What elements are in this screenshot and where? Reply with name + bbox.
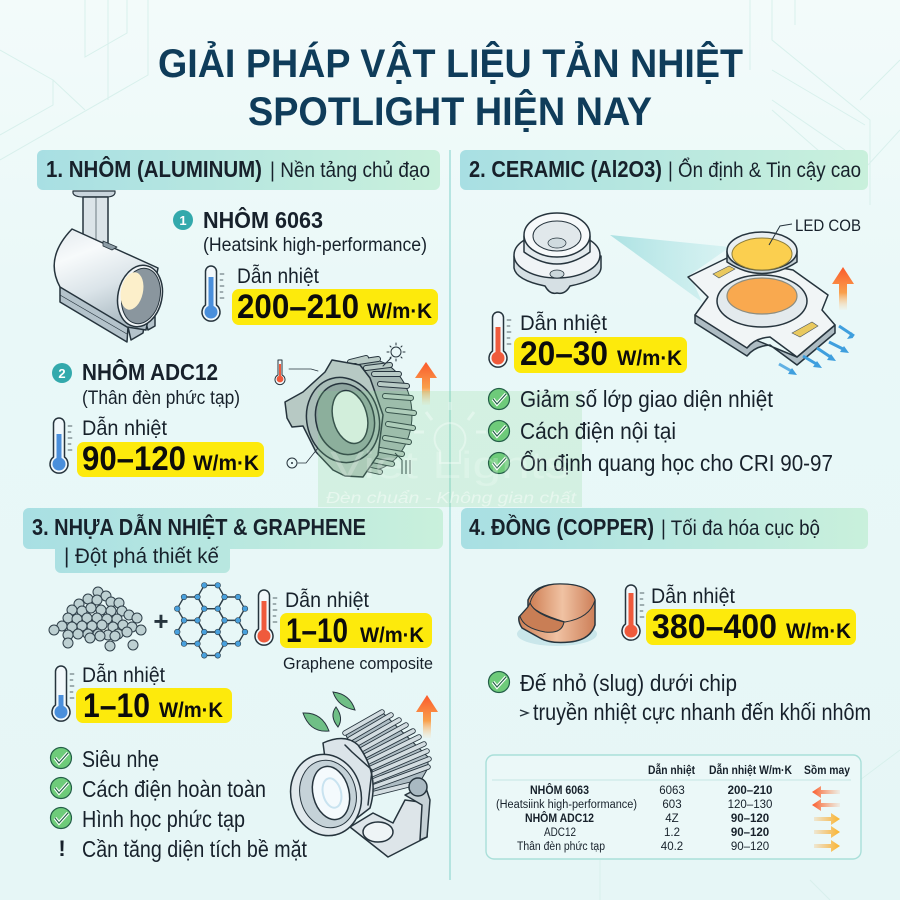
value: graphene 1-10: W/m·K — [360, 624, 424, 647]
table: comparison: 90–120 — [731, 827, 769, 839]
arrow: heat up — [415, 362, 437, 405]
table: comparison: Dẫn nhiệt W/m·K — [709, 764, 793, 777]
panel: 1 aluminum — [37, 150, 440, 478]
list: ceramic benefits: Cách điện nội tại — [520, 418, 676, 444]
heading: ceramic: | Ổn định & Tin cậy cao — [668, 158, 861, 182]
icon: copper slug — [517, 584, 597, 646]
list: plastic benefits: ! — [58, 836, 66, 861]
list: plastic benefits: Cần tăng diện tích bề mặt — [82, 836, 308, 862]
value: 90-120: Dẫn nhiệt — [82, 417, 167, 440]
table: comparison: 200–210 — [728, 785, 772, 797]
value: graphene 1-10: Graphene composite — [283, 655, 433, 673]
value: 90-120: 90–120 — [82, 440, 186, 478]
heading: plastic and graphene — [23, 508, 443, 573]
value: 380-400: 380–400 — [652, 608, 777, 646]
value: plastic 1-10: 1–10 — [83, 687, 150, 725]
table: comparison: 90–120 — [731, 813, 769, 825]
divider between columns — [449, 150, 451, 880]
table: comparison: NHÔM ADC12 — [525, 812, 594, 825]
heading: plastic and graphene: | Đột phá thiết kế — [64, 545, 219, 568]
title: SPOTLIGHT HIỆN NAY — [248, 88, 652, 134]
value: 20-30: Dẫn nhiệt — [520, 312, 607, 335]
icon: pellets — [49, 587, 146, 651]
value: 380-400: W/m·K — [786, 620, 851, 643]
list: plastic benefits: Siêu nhẹ — [82, 746, 159, 772]
heading: plastic and graphene: 3. NHỰA DẪN NHIỆT & GRAPHENE — [32, 512, 366, 540]
table: comparison: (Heatsiink high-performance) — [496, 799, 637, 811]
value: 90-120: W/m·K — [193, 452, 259, 475]
heading: copper: | Tối đa hóa cục bộ — [661, 517, 820, 540]
icon: gear — [383, 343, 405, 366]
table: comparison: 603 — [662, 799, 682, 811]
watermark — [326, 402, 577, 507]
list: ceramic benefits — [488, 386, 833, 476]
heading: aluminum: | Nền tảng chủ đạo — [270, 159, 430, 182]
value: 20-30: 20–30 — [520, 335, 608, 373]
value: 200-210: Dẫn nhiệt — [237, 265, 319, 288]
value: plastic 1-10: W/m·K — [159, 699, 223, 722]
icon: finned spotlight — [282, 712, 430, 857]
value: 200-210: W/m·K — [367, 300, 432, 323]
table: comparison: Dẫn nhiệt — [648, 764, 695, 777]
heading: ceramic: 2. CERAMIC (Al2O3) — [469, 156, 662, 182]
value: graphene 1-10 — [280, 589, 433, 673]
table: comparison: 120–130 — [728, 799, 772, 811]
heading: ceramic — [460, 150, 868, 190]
text: nhom adc12: NHÔM ADC12 — [82, 358, 218, 385]
badge 1 — [173, 210, 193, 230]
table: comparison: 4Z — [665, 813, 679, 825]
icon: thermometer blue — [202, 266, 224, 321]
panel: 2 ceramic — [318, 150, 868, 507]
panel: 3 plastic and graphene — [23, 508, 443, 862]
table: comparison: Thân đèn phức tạp — [517, 841, 605, 853]
list: copper benefit: Đế nhỏ (slug) dưới chip — [520, 670, 737, 696]
arrows: heat spread — [779, 326, 854, 375]
icon: tick marks — [395, 453, 410, 474]
table: comparison: 40.2 — [661, 841, 683, 853]
label: led cob: LED COB — [795, 216, 861, 235]
list: ceramic benefits: Giảm số lớp giao diện nhiệt — [520, 386, 774, 412]
value: 380-400 — [646, 585, 856, 646]
title: GIẢI PHÁP VẬT LIỆU TẢN NHIỆT — [158, 40, 743, 86]
light beam — [610, 235, 730, 302]
value: 200-210 — [232, 265, 438, 326]
icon: thermometer red — [622, 585, 644, 640]
text: nhom 6063: NHÔM 6063 — [203, 206, 323, 233]
heading: copper: 4. ĐỒNG (COPPER) — [469, 513, 654, 540]
panel: 4 copper — [461, 508, 871, 859]
icon: ceramic ring — [514, 213, 601, 293]
text: nhom adc12: (Thân đèn phức tạp) — [82, 388, 240, 409]
list: copper benefit — [488, 670, 871, 725]
list: plastic benefits: Hình học phức tạp — [82, 806, 245, 832]
text: nhom 6063 — [203, 206, 427, 256]
text: nhom adc12 — [82, 358, 240, 409]
badge 1: 1 — [179, 213, 187, 228]
list: plastic benefits: Cách điện hoàn toàn — [82, 776, 266, 802]
icon: thermometer blue — [52, 666, 74, 721]
icon: mini thermometer — [275, 360, 318, 385]
icon: led cob — [688, 224, 835, 365]
icon: track spotlight — [54, 191, 168, 342]
icon: leaves — [303, 692, 355, 731]
value: graphene 1-10: Dẫn nhiệt — [285, 589, 369, 612]
table: comparison: 1.2 — [664, 827, 680, 839]
table: comparison — [486, 755, 861, 859]
value: graphene 1-10: 1–10 — [286, 612, 348, 650]
value: 200-210: 200–210 — [237, 288, 359, 326]
heading: copper — [461, 508, 868, 549]
text: nhom 6063: (Heatsink high-performance) — [203, 235, 427, 256]
plus: + — [153, 606, 169, 636]
title — [158, 40, 743, 134]
value: 20-30 — [514, 312, 687, 373]
value: 20-30: W/m·K — [617, 347, 682, 370]
table: comparison: 90–120 — [731, 841, 769, 853]
table: comparison: ADC12 — [544, 827, 576, 839]
icon: thermometer blue — [50, 418, 72, 473]
table: comparison: Sồm may — [804, 765, 851, 777]
value: 380-400: Dẫn nhiệt — [651, 585, 735, 608]
icon: thermometer red — [489, 312, 511, 367]
heading: aluminum — [37, 150, 440, 190]
icon: adc12 heatsink — [275, 343, 414, 477]
list: ceramic benefits: Ổn định quang học cho CRI 90-97 — [520, 449, 833, 476]
icon: graphene lattice — [174, 582, 248, 658]
watermark tint — [318, 391, 582, 507]
watermark: Viet Lights — [330, 445, 570, 487]
heading: aluminum: 1. NHÔM (ALUMINUM) — [46, 155, 262, 182]
list: plastic benefits — [50, 746, 308, 862]
icon: thermometer red — [255, 590, 277, 645]
value: plastic 1-10: Dẫn nhiệt — [82, 664, 165, 687]
badge 2: 2 — [58, 366, 66, 381]
icon: circle marker — [287, 448, 318, 468]
arrow: heat up — [832, 267, 854, 310]
watermark: Đèn chuẩn - Không gian chất — [326, 489, 577, 507]
table: comparison: 6063 — [659, 785, 685, 797]
badge 2 — [52, 363, 72, 383]
value: plastic 1-10 — [76, 664, 232, 725]
arrow: heat up — [416, 695, 438, 738]
value: 90-120 — [77, 417, 264, 478]
table: comparison: NHÔM 6063 — [530, 784, 589, 797]
